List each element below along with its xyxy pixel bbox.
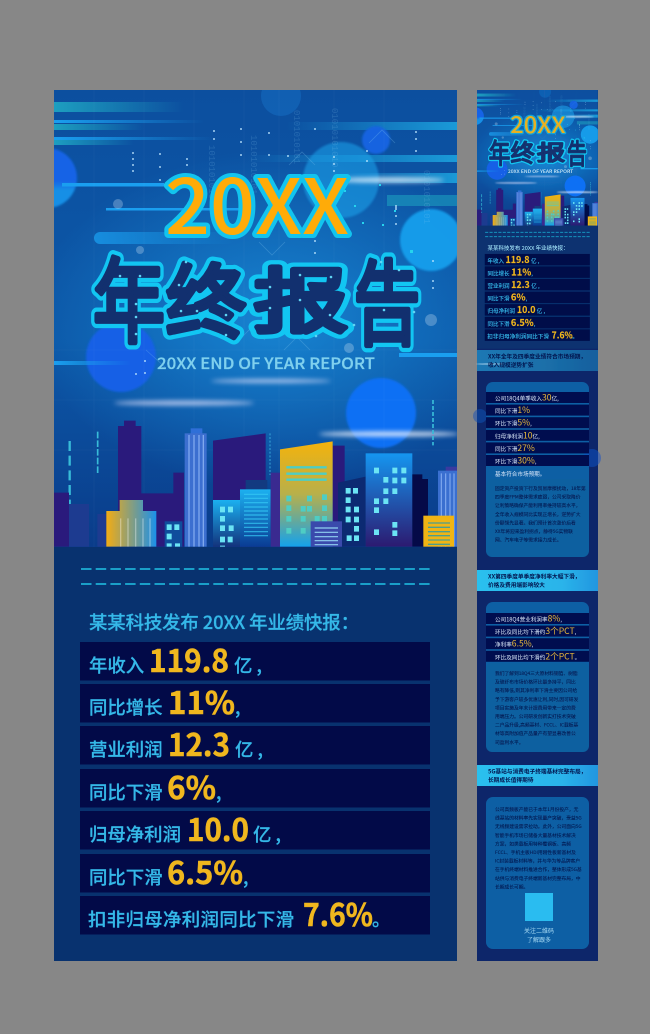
card: section three with QR code: 线基站的材料率先实现量产突破，受益5G [495,815,582,822]
card: section two [486,602,589,752]
card: section two: 用端压力。公司研发创新实打技术突破 [495,713,576,720]
card: section three with QR code: 智能手机市场已储备大量基材技术解决 [495,832,576,839]
card: section two: 司盈利水平。 [495,739,524,746]
banner: section two: XX第四季度单季度净利率大幅下滑， [488,572,580,580]
card: section two: 净利率6.5%, [495,638,534,650]
title: 年终报告: 年 [93,228,165,362]
card: section one: 网、汽车电子等需求接力成长。 [495,537,562,544]
banner: section three: 长期成长值得期待 [488,775,534,784]
card: section two: 予下游客户较多优惠让利,同时,因可研发 [495,696,579,703]
row: revenue growth [80,678,430,723]
thumbnail hero and summary: , [531,269,533,277]
thumbnail hero and summary: 营业利润 [488,282,510,290]
banner: section three: 5G基站与消费电子终端基材完整布局， [488,766,586,776]
card: section three with QR code: 公司高频板产能已于本年1月份投产，无 [495,806,579,813]
thumbnail hero and summary: 。 [572,332,578,340]
row: operating profit: 12.3 [168,720,230,765]
title: 年终报告: 告 [354,231,420,365]
card: section three with QR code: 无线频建设需求拉动。此外，公司面向5G [495,823,582,830]
thumbnail hero and summary: 20XX [510,107,566,140]
card: section three with QR code: 站供与消费电子终端新基材完整布局，中 [495,875,581,882]
card: section one: 全年收入规模同比实现正增长，逆势扩大 [495,511,581,518]
card: section three with QR code: IC封装载板材料等，并与华为等品牌客户 [495,858,580,865]
card: section three with QR code [486,797,589,949]
card: section one: 环比下滑5%, [495,417,532,429]
card: section three with QR code: 方案，如类载板用特种覆铜板、高频 [495,840,571,847]
card: section one: 归母净利润10亿, [495,429,540,441]
card: section two: 公司18Q4营业利润率8%, [495,612,562,624]
banner: section two [477,570,598,591]
row: revenue growth: 同比增长 [89,694,163,720]
card: section two: 我们了解到18Q4三大原材料铜箔、树脂 [495,670,578,677]
row: adjusted net profit decline: 扣非归母净利润同比下滑 [88,906,294,932]
thumbnail hero and summary: 7.6% [552,327,573,341]
title: 年终报告: 终 [166,239,246,355]
card: section three with QR code: 了解跟多 [527,935,551,944]
thumbnail hero and summary: , [534,320,536,328]
title: 年终报告: 报 [254,245,348,346]
thumbnail hero and summary: 12.3 [511,277,530,291]
row: net profit decline: 6.5% [167,848,243,893]
thumbnail hero and summary: 6% [511,290,526,304]
banner: section one: XX年全年及四季度业绩符合市场预期， [488,352,586,360]
row: net profit: 10.0 [187,805,249,850]
thumbnail hero and summary: 扣非归母净利润同比下滑 [487,332,550,340]
panel: full page thumbnail (right) [465,86,610,961]
row: adjusted net profit decline: 。 [372,906,390,932]
title: 年终报告: 报 [254,245,348,346]
thumbnail hero and summary: 11% [511,264,531,278]
title: 年终报告: 年 [93,228,165,362]
row: revenue growth: 11% [168,678,235,723]
thumbnail hero and summary: 亿 , [531,257,540,265]
thumbnail hero and summary: 同比下滑 [488,320,510,328]
card: section two: 环比及同比均下滑约2个PCT。 [495,650,580,662]
thumbnail hero and summary: 年收入 [488,257,505,265]
thumbnail hero and summary: 亿 , [537,307,545,315]
thumbnail hero and summary: 同比下滑 [488,295,510,303]
row: operating profit: 亿 , [235,736,263,762]
QR caption: 关注二维码 [524,926,554,935]
row: revenue: 119.8 [149,636,229,681]
title: 年终报告 [93,228,420,365]
card: section one: 基本符合市场预期。 [495,470,545,478]
row: adjusted net profit decline: 7.6% [303,890,373,935]
row: net profit: 亿 , [253,821,281,847]
card: section three with QR code: 在手机终端材料推进合作，整体形成5G基 [495,866,582,873]
thumbnail hero and summary: 归母净利润 [488,307,516,315]
thumbnail hero and summary: 终 [511,134,535,169]
subtitle: 20XX END OF YEAR REPORT [157,352,375,374]
row: profit decline: 6% [167,763,216,808]
thumbnail hero and summary: 6.5% [511,315,534,329]
row: net profit [80,805,430,850]
thumbnail hero and summary: 10.0 [517,302,536,316]
thumbnail hero and summary: 告 [567,131,587,171]
thumbnail hero and summary: 某某科技发布 20XX 年业绩快报： [488,244,569,252]
card: section two: 环比及同比均下滑约3个PCT, [495,625,577,637]
row: profit decline [80,763,430,808]
card: section one: 四季度FPM整体需求疲弱，公司采取降价 [495,494,581,501]
banner: section three [477,765,598,786]
row: net profit decline [80,848,430,893]
thumbnail hero and summary: 20XX END OF YEAR REPORT [508,169,573,175]
title: 年终报告: 告 [354,231,420,365]
row: revenue: 亿 , [234,652,262,678]
thumbnail hero and summary: 同比增长 [488,269,510,277]
card: section one: 份额领先显著。我们预计首次涨价后看 [495,519,576,526]
card: section two: 项目实施及年末计提费用带来一定的费 [495,704,576,711]
dashed divider [81,569,430,584]
banner: section one: 收入规模逆势扩张 [488,360,534,369]
card: section two: 及玻纤布市场价格环比最多持平，同比 [495,679,576,686]
row: adjusted net profit decline [80,890,430,935]
row: operating profit [80,720,430,765]
thumbnail hero and summary: 报 [537,137,565,167]
card: section one: 固定资产投资下行及贸易摩擦扰动，18年第 [495,485,586,492]
card: section two: 材等高附加值产品量产有望显著改善公 [495,730,576,737]
panel: long poster preview (left) [14,76,497,961]
thumbnail hero and summary: 终 [511,134,535,169]
card: section one: 同比下滑1% [495,404,530,416]
card: section two: 略有降低,则其净利率下滑主要因公司给 [495,687,577,694]
row: profit decline: 同比下滑 [89,779,163,805]
title: 20XX: 20XX [165,146,349,256]
banner: section one [476,350,598,371]
card: section one [473,382,601,557]
thumbnail hero and summary: 告 [567,131,587,171]
row: net profit: 归母净利润 [89,821,181,847]
row: revenue [80,636,430,681]
thumbnail hero and summary: 报 [537,137,565,167]
title: 年终报告: 终 [166,239,246,355]
row: revenue: 年收入 [89,652,144,678]
card: section one: 同比下滑27% [495,442,535,454]
card: section one: 公司18Q4单季收入30亿, [495,392,559,404]
card: section one: XX年将迎来盈利拐点，静待5G实物联 [495,528,573,535]
thumbnail hero and summary: , [526,295,528,303]
row: net profit decline: , [243,864,248,890]
thumbnail hero and summary: 年 [489,132,510,172]
thumbnail hero and summary: 亿 , [531,282,540,290]
heading: results summary: 某某科技发布 20XX 年业绩快报： [89,609,359,635]
row: operating profit: 营业利润 [89,736,163,762]
card: section three with QR code: 长期成长可期。 [495,883,528,890]
thumbnail hero and summary: 119.8 [506,252,530,266]
row: profit decline: , [216,779,221,805]
card: section one: 环比下滑30%, [495,454,537,466]
card: section one: 让利策略确保产能利用率维持较高水平， [495,502,581,509]
thumbnail hero and summary [465,86,610,349]
card: section three with QR code: FCCL、手机主板HDI用刚性板新基材及 [495,849,576,856]
row: revenue growth: , [235,694,240,720]
card: section two: 二户品升级,高频基材、FCCL、IC载板基 [495,722,579,729]
thumbnail hero and summary: 年 [489,132,510,172]
banner: section two: 价格及费用端影响较大 [488,580,545,589]
row: net profit decline: 同比下滑 [89,864,163,890]
hero illustration with city skyline [14,76,497,547]
icon: QR code placeholder [525,893,553,921]
